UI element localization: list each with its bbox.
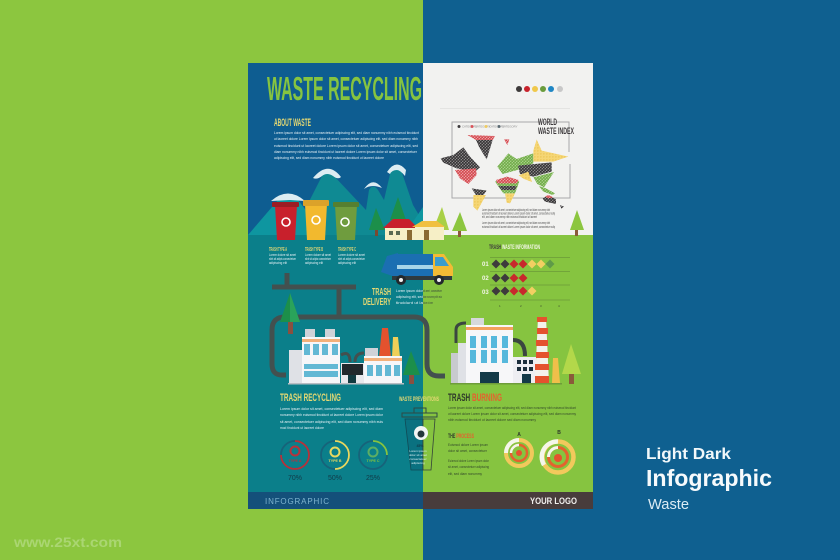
the process text: elit, sed diam nonummy	[448, 472, 482, 476]
watermark: www.25xt.com	[13, 534, 122, 550]
ring chart: type a	[281, 441, 309, 482]
world waste index heading	[538, 117, 574, 136]
map caption text: Lorem ipsum dolor sit amet, consectetuer adipiscing elit, sed diam nonummy nibh	[482, 221, 550, 225]
red bin	[272, 202, 299, 240]
trash delivery text continued: dolore ut lorem	[423, 301, 433, 305]
background: green half	[0, 0, 423, 560]
dial a	[506, 432, 532, 466]
trash can: 45%	[416, 444, 424, 448]
recycling factory	[288, 328, 404, 384]
footer: your logo: YOUR LOGO	[530, 496, 577, 506]
trash can: adipiscing	[411, 461, 425, 465]
panel: light top	[423, 63, 593, 235]
dial a: A	[517, 432, 521, 438]
map legend: CATEGORY	[489, 124, 505, 128]
panel: teal middle	[248, 235, 423, 492]
trash delivery heading: TRASH	[372, 287, 391, 298]
trash type labels: nibh sit adipis consectetuer	[269, 257, 296, 261]
trash type labels: adipiscing elit	[305, 261, 323, 265]
about waste text: euismod tincidunt ut laoreet dolore Lorem ipsum dolor sit amet, consectetuer adipiscing elit, sed	[274, 143, 418, 148]
trash can: dolor sit amet	[409, 453, 427, 457]
chart: trash waste information: 1	[499, 304, 501, 308]
map legend: CATEGORY	[462, 124, 478, 128]
about waste text: diam nonummy nibh euismod tincidunt ut laoreet dolore Lorem ipsum dolor sit amet, consectetuer	[274, 149, 418, 154]
trash can: consectetuer	[409, 457, 427, 461]
trash type labels: adipiscing elit	[269, 261, 287, 265]
ring chart: type c	[359, 441, 387, 482]
map legend: CATEGORY	[502, 124, 518, 128]
chart: trash waste information: 02	[482, 276, 489, 282]
trash delivery text: Lorem ipsum dolor	[396, 288, 424, 293]
ring chart: type b: TYPE B	[329, 459, 342, 463]
small tree	[403, 351, 420, 384]
trash type labels: nibh sit adipis consectetuer	[338, 257, 365, 261]
colour dots	[516, 86, 563, 92]
chart: trash waste information	[482, 245, 570, 308]
poster: diam nonummy nibh euis	[423, 295, 442, 299]
map legend	[458, 124, 518, 128]
ring chart: type a: TYPE A	[289, 459, 302, 463]
truck	[381, 253, 453, 285]
the process text	[448, 443, 490, 476]
map caption text: elit, sed diam nonummy nibh euismod tincidunt ut laoreet	[482, 215, 537, 219]
ring chart: type c: TYPE C	[367, 459, 380, 463]
the process text: Euismod dolore Lorem ipsum dolor	[448, 459, 490, 463]
trash delivery text: adipiscing elit, sed	[396, 294, 423, 299]
footer: infographic label: INFOGRAPHIC	[265, 497, 329, 506]
ring chart: type a: 70%	[288, 475, 302, 482]
light tree	[562, 344, 581, 384]
chart: trash waste information: 4	[558, 304, 560, 308]
bins	[272, 200, 359, 240]
trash type labels: TRASH TYPE C	[338, 247, 356, 253]
yellow bin	[303, 200, 329, 240]
about waste text: ut laoreet dolore Lorem ipsum dolor sit amet, consectetuer adipiscing elit, sed diam nonummy nibh	[274, 136, 418, 141]
trees by mountains	[369, 197, 584, 237]
the process text: Euismod dolore Lorem ipsum	[448, 443, 488, 447]
poster: WASTE RECYCLING	[267, 70, 422, 107]
trash type labels: adipiscing elit	[338, 261, 356, 265]
about waste text: Lorem ipsum dolor sit amet, consectetuer adipiscing elit, sed diam nonummy nibh euismod tincidunt	[274, 130, 420, 135]
trash type labels: nibh sit adipis consectetuer	[305, 257, 331, 261]
map legend: CATEGORY	[475, 124, 491, 128]
background: blue half	[423, 0, 840, 560]
caption: infographic: Infographic	[646, 465, 772, 491]
green bin	[333, 202, 359, 240]
the process heading: THE PROCESS	[448, 434, 474, 440]
trash recycling text	[280, 406, 384, 430]
panel: green middle	[423, 235, 593, 492]
chart: trash waste information: 01	[482, 262, 489, 268]
top divider	[440, 107, 570, 110]
trash type labels: Lorem dolore sit amet	[305, 253, 331, 257]
footer: dark	[248, 492, 423, 509]
ring chart: type b	[321, 441, 349, 482]
panel: dark top	[248, 63, 423, 235]
trash delivery text	[396, 288, 424, 305]
trash recycling text: Lorem ipsum dolor sit amet, consectetuer adipiscing elit, sed diam	[280, 406, 384, 411]
chart heading: TRASH WASTE INFORMATION	[489, 245, 540, 251]
world waste index heading: WORLD	[538, 117, 557, 127]
trash type labels: Lorem dolore sit amet	[269, 253, 296, 257]
the process text: dolor sit amet, consectetuer	[448, 449, 488, 453]
the process text: sit amet, consectetuer adipiscing	[448, 465, 489, 469]
map caption text	[482, 208, 555, 229]
trash recycling text: nonummy nibh euismod tincidunt ut laoreet dolore Lorem ipsum dolor	[280, 412, 384, 417]
trash type labels: TRASH TYPE B	[305, 247, 323, 253]
trash can	[402, 408, 437, 470]
houses	[383, 219, 445, 240]
trash delivery heading	[363, 287, 391, 308]
tree on road	[280, 293, 300, 334]
dial b	[542, 430, 574, 472]
burning factory	[450, 317, 562, 384]
trash recycling text: mod tincidunt ut laoreet dolore	[280, 425, 325, 430]
chart: trash waste information: 2	[520, 304, 522, 308]
ring chart: type b: 50%	[328, 475, 342, 482]
trash burning text: ut laoreet dolore Lorem ipsum dolor sit amet, consectetuer adipiscing elit, sed diam nonummy	[448, 412, 576, 416]
world map	[441, 135, 568, 211]
world map frame	[452, 122, 570, 198]
trash delivery heading: DELIVERY	[363, 297, 391, 308]
trash delivery text continued: sit amet, consectetuer	[423, 289, 442, 293]
trash type labels	[269, 247, 365, 265]
map caption text: Lorem ipsum dolor sit amet, consectetuer adipiscing elit, sed diam nonummy nibh	[482, 208, 550, 212]
trash burning text	[448, 406, 577, 422]
caption: light dark: Light Dark	[646, 446, 731, 463]
trash recycling text: sit amet, consectetuer adipiscing elit, sed diam nonummy nibh euis	[280, 419, 383, 424]
world waste index heading: WASTE INDEX	[538, 126, 574, 136]
trash burning heading: TRASH BURNING	[448, 392, 502, 404]
trash type labels: TRASH TYPE A	[269, 247, 287, 253]
dial b: B	[557, 430, 561, 436]
caption: waste: Waste	[648, 496, 689, 513]
waste prevention heading: WASTE PREVENTIONS	[399, 397, 439, 403]
about waste text	[274, 130, 420, 160]
trash burning text: nibh euismod tincidunt ut laoreet dolore sed diam nonummy	[448, 418, 536, 422]
chart: trash waste information: 03	[482, 290, 489, 296]
map caption text: euismod tincidunt ut laoreet dolore Lorem ipsum dolor sit amet, consectetuer adip	[482, 225, 555, 229]
trash burning text: Lorem ipsum dolor sit amet, consectetuer adipiscing elit, sed diam nonummy nibh euismod tincidunt	[448, 406, 577, 410]
footer: light	[423, 492, 593, 509]
road network	[272, 273, 445, 376]
poster	[248, 63, 593, 509]
about waste text: adipiscing elit, sed diam nonummy nibh euismod tincidunt ut laoreet dolore	[274, 155, 385, 160]
trash can: Lorem ipsum	[409, 449, 427, 453]
trash delivery text continued	[423, 289, 442, 305]
chart: trash waste information: 3	[540, 304, 542, 308]
poster: ABOUT WASTE	[274, 117, 311, 129]
trash type labels: Lorem dolore sit amet	[338, 253, 365, 257]
map caption text: euismod tincidunt ut laoreet dolore Lorem ipsum dolor sit amet, consectetuer adip	[482, 212, 555, 216]
trash delivery text: tincidunt ut la	[396, 300, 424, 305]
trash recycling heading: TRASH RECYCLING	[280, 392, 341, 404]
mountains	[248, 164, 423, 235]
ring chart: type c: 25%	[366, 475, 380, 482]
